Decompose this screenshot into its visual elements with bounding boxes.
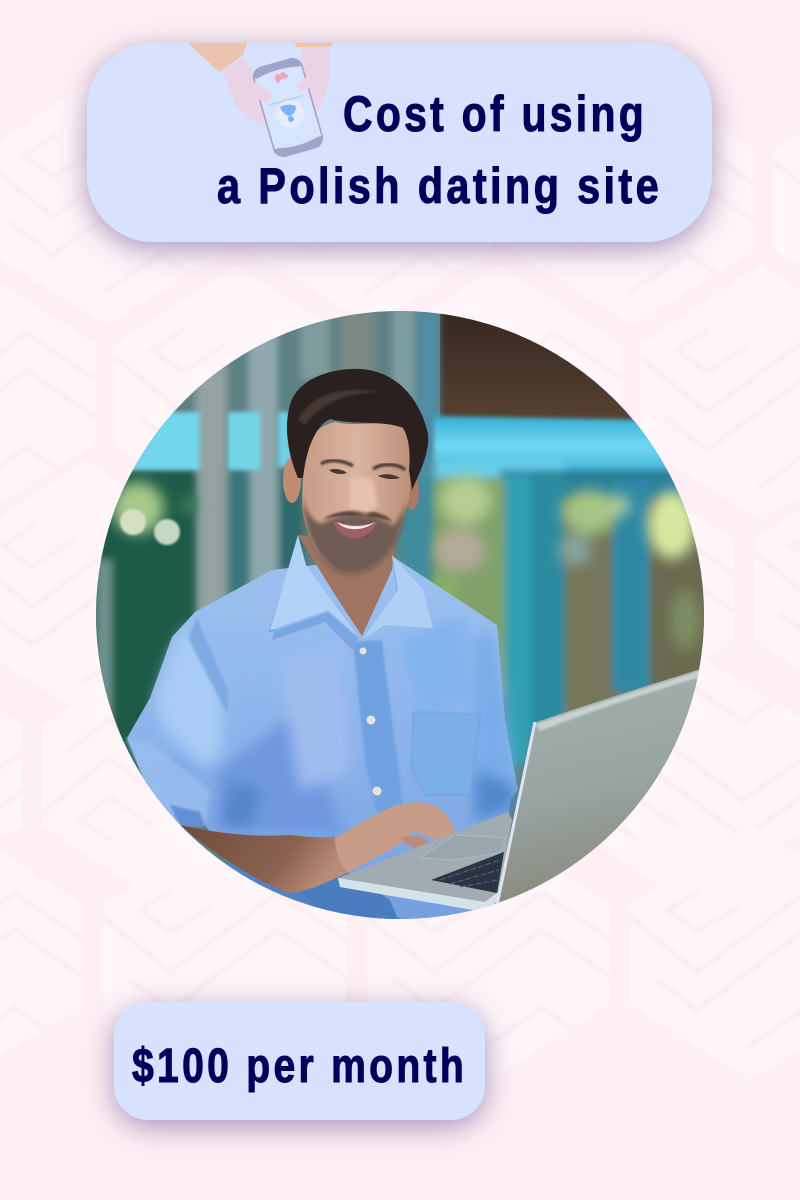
- photo: man with laptop in a circle: [90, 305, 710, 925]
- banner background: [87, 43, 712, 242]
- title text: [217, 86, 662, 214]
- title text: Cost of using: [343, 86, 647, 142]
- sleeve seam and cuff: [188, 618, 228, 715]
- eyebrows: [321, 461, 353, 466]
- icon: heart: [275, 72, 288, 84]
- blurred garden right: [434, 458, 710, 765]
- callout background: [114, 1002, 485, 1120]
- keyboard: [431, 852, 504, 893]
- green trees left: [90, 470, 195, 780]
- man: forearm and hand: [180, 802, 455, 893]
- panel: title banner: [87, 43, 712, 242]
- eyes: [329, 469, 347, 474]
- cyan beams: [120, 412, 292, 470]
- trackpad: [420, 835, 505, 860]
- laptop lid: [497, 668, 704, 905]
- shirt placket: [353, 640, 403, 815]
- mouth: [333, 520, 378, 538]
- man: head: [283, 369, 428, 575]
- nose: [350, 478, 378, 514]
- face: [302, 422, 412, 574]
- hair: [287, 369, 428, 490]
- mustache: [323, 510, 392, 522]
- price text: $100 per month: [132, 1040, 467, 1093]
- ears: [283, 457, 301, 503]
- title text: a Polish dating site: [217, 158, 662, 214]
- icon: chat bubble: [280, 105, 296, 116]
- icon: hands holding phone: [188, 43, 332, 159]
- buttons: [360, 648, 382, 796]
- laptop: [338, 668, 704, 912]
- blurred building background: [90, 305, 710, 925]
- man: neck and collar: [268, 535, 433, 650]
- dark shirt below arm: [224, 858, 400, 919]
- shirt pocket: [412, 712, 480, 795]
- beard: [302, 494, 407, 575]
- laptop base: [338, 812, 512, 912]
- man: shirt: [125, 556, 518, 925]
- panel: price callout: [114, 1002, 485, 1120]
